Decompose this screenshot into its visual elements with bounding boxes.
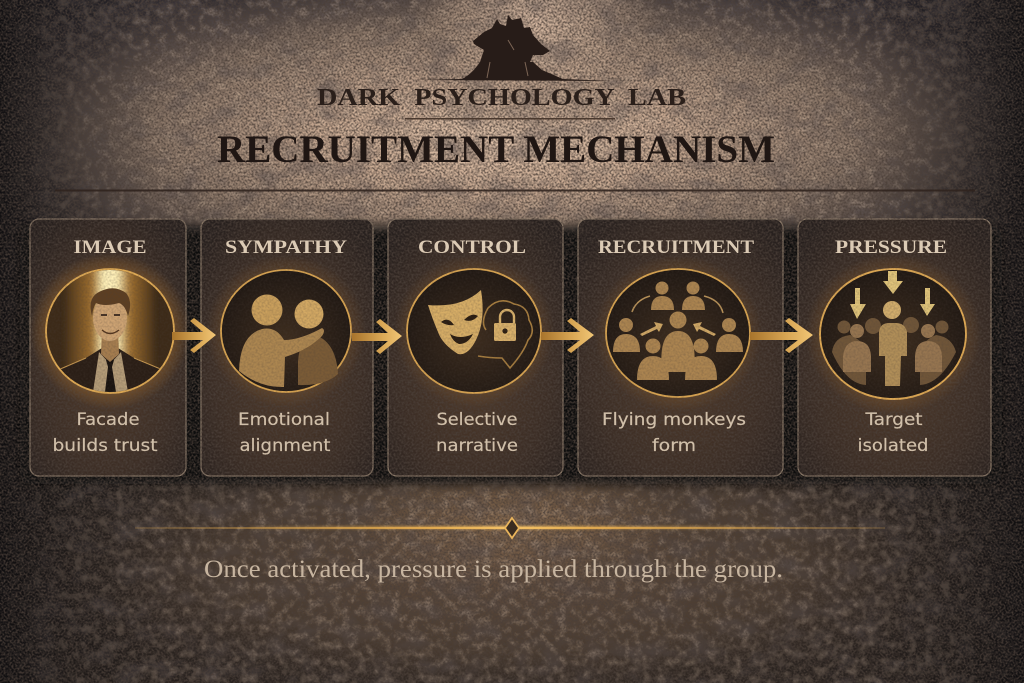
icon: two people comforting — [206, 255, 366, 407]
arrow: sympathy to control — [352, 319, 402, 354]
text: sympathy caption: Emotional — [238, 410, 330, 430]
icon: isolated target under pressure — [805, 254, 981, 414]
closing statement: Once activated, pressure is applied through the group. — [204, 556, 783, 583]
title: RECRUITMENT MECHANISM — [217, 128, 775, 171]
text: image caption — [52, 410, 158, 456]
text: pressure caption: Target — [864, 410, 923, 430]
text: recruitment caption — [602, 410, 746, 456]
text: recruitment caption: form — [652, 436, 696, 456]
heading: image: IMAGE — [74, 237, 146, 258]
heading: pressure: PRESSURE — [835, 237, 947, 258]
gold divider with diamond — [135, 518, 885, 538]
icon: cerberus logo — [415, 15, 612, 81]
text: image caption: Facade — [76, 410, 140, 430]
text: control caption: Selective — [436, 410, 518, 430]
arrow: recruitment to pressure — [750, 318, 813, 353]
heading: sympathy: SYMPATHY — [225, 237, 347, 258]
text: control caption: narrative — [436, 436, 518, 456]
panel: sympathy card — [201, 219, 373, 476]
panel: pressure card — [798, 219, 991, 476]
panel: recruitment card — [578, 219, 783, 476]
icon texture — [40, 265, 975, 400]
text: sympathy caption — [238, 410, 331, 456]
panel: image card — [30, 219, 186, 476]
icon: mask and locked brain — [394, 255, 554, 407]
arrow: control to recruitment — [541, 318, 594, 353]
text: recruitment caption: Flying monkeys — [602, 410, 746, 430]
heading: recruitment: RECRUITMENT — [598, 237, 754, 258]
header divider — [55, 190, 975, 192]
text: pressure caption — [858, 410, 928, 456]
icon: businessman portrait — [30, 253, 190, 409]
brand name: DARK PSYCHOLOGY LAB — [317, 85, 686, 111]
text: image caption: builds trust — [52, 436, 158, 456]
cards shadow — [20, 226, 1002, 484]
panel: control card — [388, 219, 563, 476]
text: control caption — [436, 410, 518, 456]
text: pressure caption: isolated — [858, 436, 928, 456]
heading: control: CONTROL — [418, 237, 526, 258]
text: sympathy caption: alignment — [240, 436, 331, 456]
arrow: image to sympathy — [172, 318, 216, 353]
line under brand — [405, 118, 615, 120]
icon: recruited crowd — [594, 255, 762, 411]
